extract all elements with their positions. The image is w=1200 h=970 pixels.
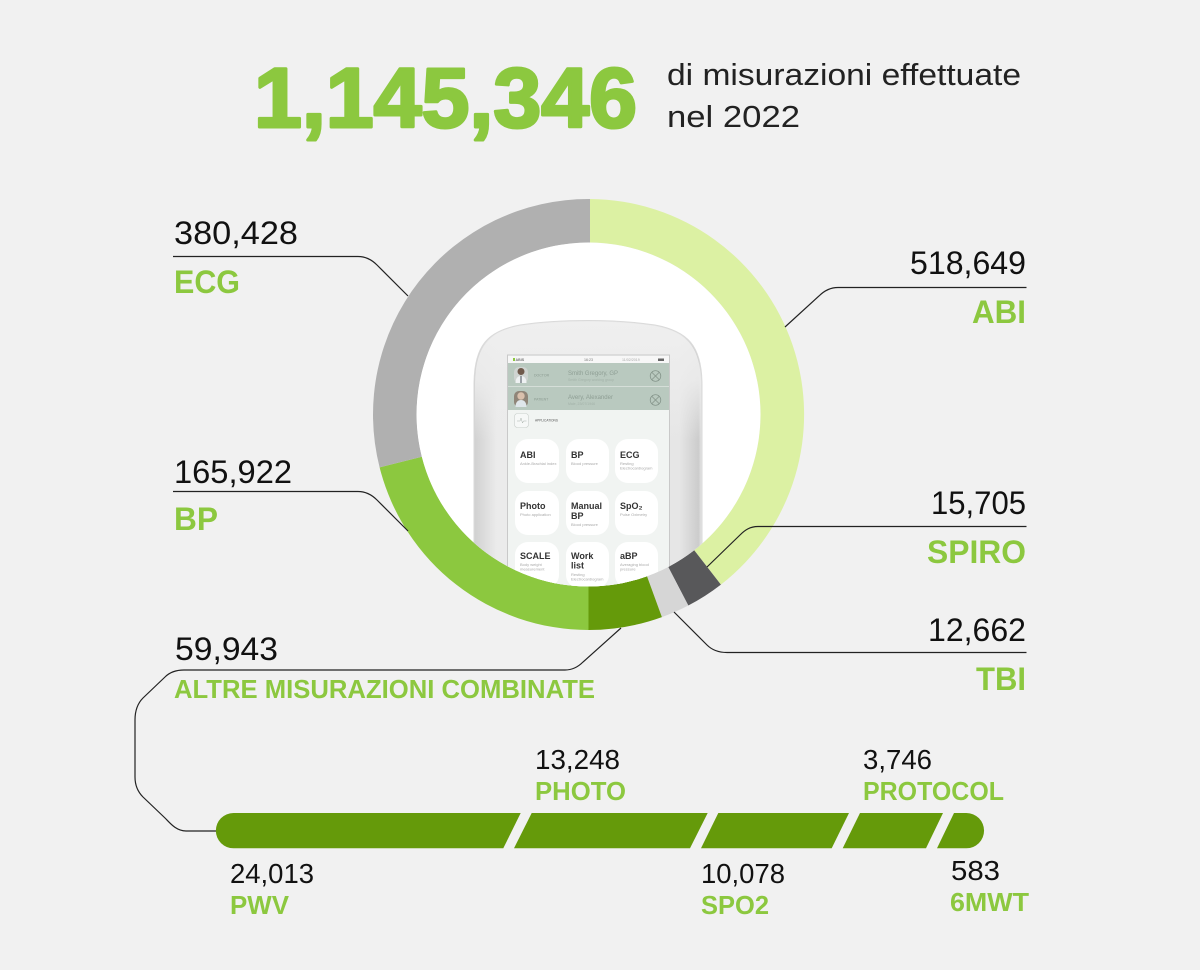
doctor row: DOCTOR	[534, 374, 550, 378]
tile: ABI	[515, 439, 559, 483]
tile: BP	[566, 439, 609, 483]
segment: ABI	[590, 199, 804, 585]
status bar: ABIS	[516, 358, 525, 362]
tile: SCALE: measurement	[520, 566, 545, 572]
bar segment: PHOTO	[514, 813, 708, 848]
patient row: PATIENT	[534, 398, 549, 402]
label: 6MWT	[950, 855, 1029, 917]
label: PROTOCOL	[863, 744, 1004, 806]
tile: ECG: ECG	[620, 450, 640, 460]
label: TBI	[928, 612, 1026, 697]
label: TBI: TBI	[976, 661, 1026, 697]
label: 6MWT: 583	[951, 855, 1000, 886]
leader line: ABI	[785, 288, 1026, 327]
tile: Photo: Photo	[520, 501, 546, 511]
tile: Work list: Electrocardiogram	[571, 576, 604, 582]
label: ABI	[910, 245, 1026, 330]
tile: ABI: ABI	[520, 450, 536, 460]
tile: ECG: Resting	[620, 461, 634, 466]
tile: SCALE: Body weight	[520, 562, 543, 567]
doctor row: Smith Gregory, GP	[568, 370, 618, 377]
label: BP: 165,922	[174, 454, 292, 490]
tile: SpO2	[615, 491, 658, 535]
tile: Work list: Work	[571, 551, 594, 561]
leader line: TBI	[674, 612, 1026, 652]
leader line: BP	[173, 492, 408, 531]
segment: other combined	[588, 576, 662, 630]
tile: aBP	[615, 542, 658, 588]
patient row	[508, 387, 669, 410]
tile: Manual BP: Manual	[571, 501, 602, 511]
leader line: other combined to bar	[135, 628, 621, 831]
tile: Work list: Resting	[571, 572, 585, 577]
label: SPO2: 10,078	[701, 858, 785, 889]
tile: Photo: Photo application	[520, 512, 551, 517]
tile: ECG	[615, 439, 658, 483]
tile: Work list	[566, 542, 609, 588]
tile: SpO2: Pulse Oximetry	[620, 512, 647, 517]
label: other combined: ALTRE MISURAZIONI COMBINATE	[174, 674, 595, 704]
title: total measurements: 1,145,346	[254, 51, 637, 145]
bar segment: 6MWT	[937, 813, 984, 848]
tile: SCALE	[515, 542, 559, 588]
app status: APPLICATIONS	[535, 418, 558, 422]
label: PWV: 24,013	[230, 858, 314, 889]
doctor row: Smith Gregory working group	[568, 378, 614, 382]
label: ABI: ABI	[972, 294, 1026, 330]
label: PWV: PWV	[230, 890, 290, 920]
label: SPO2	[701, 858, 785, 920]
donut chart	[373, 199, 804, 630]
leader line: SPIRO	[707, 526, 1026, 567]
segment: ECG	[373, 199, 590, 467]
label: PHOTO	[535, 744, 626, 806]
tile: BP: BP	[571, 450, 584, 460]
label: SPIRO: 15,705	[931, 485, 1026, 521]
segment: SPIRO	[668, 550, 721, 606]
tile: Photo	[515, 491, 559, 535]
status bar: 11/02/2019	[622, 358, 640, 362]
tile: SpO2: SpO₂	[620, 501, 643, 511]
bar segment: PWV	[216, 813, 521, 848]
app status	[514, 414, 558, 428]
label: SPO2: SPO2	[701, 890, 769, 920]
tile: Manual BP: Blood pressure	[571, 522, 599, 527]
segment: TBI	[647, 567, 688, 617]
label: ECG	[174, 215, 298, 300]
tile: SCALE: SCALE	[520, 551, 551, 561]
tile: aBP: Averaging blood	[620, 562, 649, 567]
patient row: Avery, Alexander	[568, 394, 614, 401]
doctor row	[508, 363, 669, 386]
tile: Work list: list	[571, 560, 584, 570]
label: ECG: 380,428	[174, 215, 298, 251]
tablet body	[474, 320, 702, 586]
label: TBI: 12,662	[928, 612, 1026, 648]
tile: Manual BP: BP	[571, 511, 584, 521]
label: SPIRO: SPIRO	[927, 534, 1026, 570]
segmented bar	[216, 813, 984, 848]
tile: Manual BP	[566, 491, 609, 535]
label: PHOTO: 13,248	[535, 744, 620, 775]
tile: ECG: Electrocardiogram	[620, 466, 653, 470]
label: ABI: 518,649	[910, 245, 1026, 281]
label: ECG: ECG	[174, 264, 240, 300]
label: BP	[174, 454, 292, 537]
tile: BP: Blood pressure	[571, 461, 599, 466]
tile: ABI: Ankle-Brachial index	[520, 461, 556, 466]
title: total measurements	[254, 51, 1021, 145]
label: PROTOCOL: 3,746	[863, 744, 932, 775]
status bar	[513, 358, 664, 361]
label: BP: BP	[174, 501, 218, 537]
patient row: Male, 23/07/1946	[568, 402, 595, 406]
status bar: 16:23	[584, 358, 593, 362]
label: other combined	[174, 631, 595, 704]
label: PWV	[230, 858, 314, 920]
label: PHOTO: PHOTO	[535, 776, 626, 806]
title: total measurements: di misurazioni effettuate	[667, 58, 1021, 92]
label: SPIRO	[927, 485, 1026, 570]
tile: aBP: aBP	[620, 551, 638, 561]
tablet screen	[508, 355, 670, 595]
label: PROTOCOL: PROTOCOL	[863, 776, 1004, 806]
label: other combined: 59,943	[175, 631, 278, 667]
bar segment: PROTOCOL	[843, 813, 943, 848]
label: 6MWT: 6MWT	[950, 887, 1029, 917]
bar segment: SPO2	[701, 813, 849, 848]
segment: BP	[380, 457, 588, 630]
title: total measurements: nel 2022	[667, 100, 800, 134]
leader line: ECG	[173, 256, 408, 296]
donut centre with tablet	[416, 242, 760, 586]
tile: aBP: pressure	[620, 566, 636, 572]
